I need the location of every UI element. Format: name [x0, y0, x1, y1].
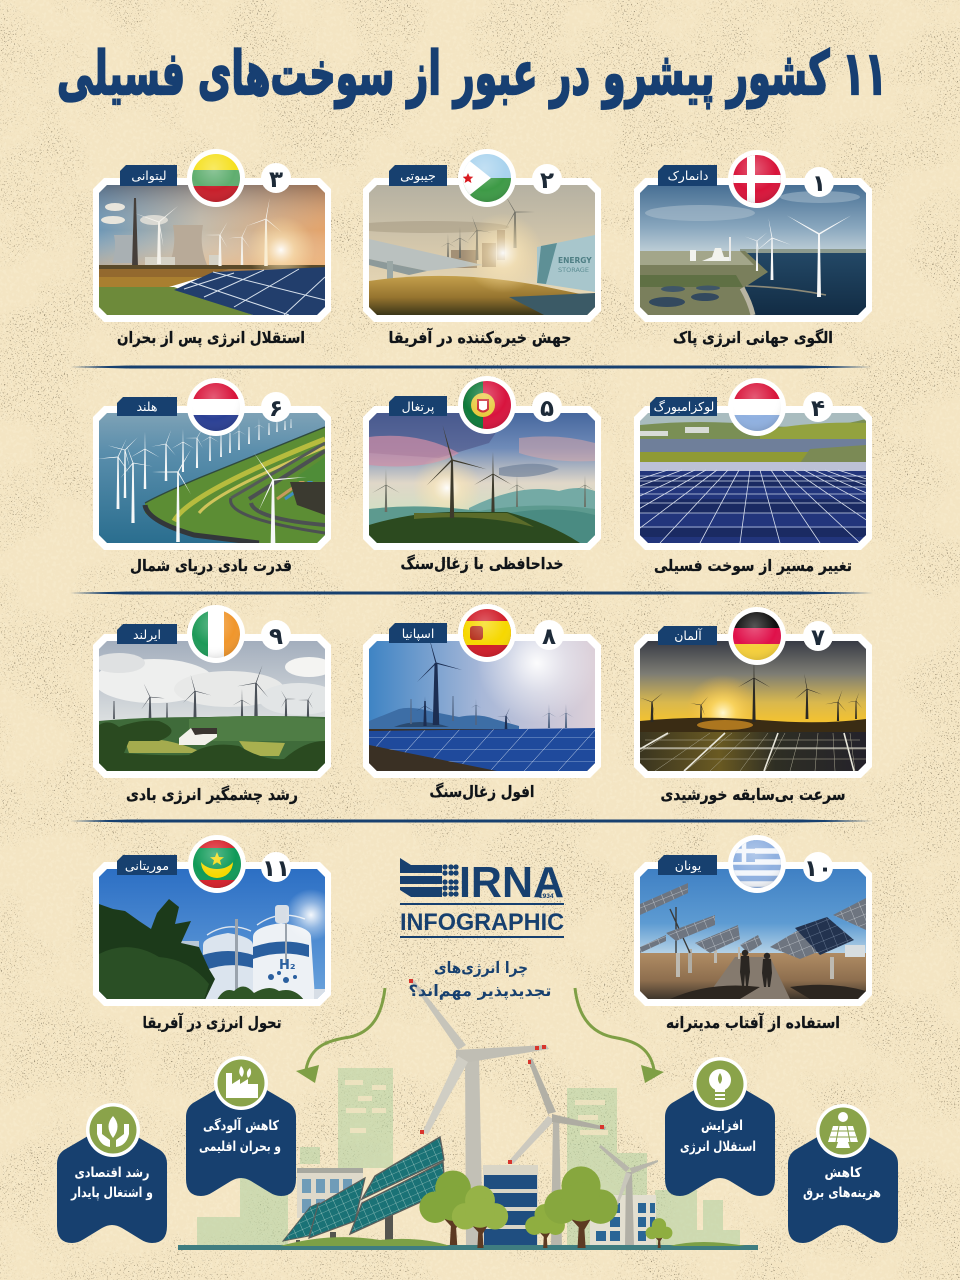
badge text [70, 1165, 153, 1201]
flag: Luxembourg [728, 378, 786, 436]
photo: green hills and turbines [93, 641, 339, 771]
arrow: right, green [575, 988, 664, 1083]
flag: Lithuania [187, 149, 245, 207]
illustration: renewable city [178, 979, 758, 1250]
flag: Greece [728, 835, 786, 893]
badge text: و اشتغال پایدار [70, 1185, 153, 1201]
number badge [803, 621, 833, 651]
photo: cooling towers and solar [99, 185, 329, 315]
number badge [534, 620, 564, 650]
wind turbine small [599, 1145, 658, 1246]
country label: پرتغال [402, 399, 435, 415]
flag: Mauritania [188, 835, 246, 893]
number badge [532, 164, 562, 194]
badge text [803, 1165, 881, 1201]
country label [658, 855, 717, 875]
number badge [261, 392, 291, 422]
IRNA wordmark: IRNA [459, 858, 564, 907]
country label: اسپانیا [402, 626, 434, 641]
badge: lower electricity costs [788, 1104, 898, 1243]
number badge: ۳ [269, 167, 283, 193]
number badge: ۸ [542, 624, 556, 650]
country label: جیبوتی [400, 168, 436, 184]
number badge: ۶ [269, 396, 283, 422]
country label: ایرلند [133, 627, 161, 643]
photo: solar and turbine [369, 641, 595, 771]
ground [178, 1245, 758, 1250]
panel: Luxembourg card [634, 378, 872, 550]
flag: Ireland [187, 605, 245, 663]
caption: Germany: سرعت بی‌سابقه خورشیدی [660, 785, 846, 804]
number badge: ۵ [540, 396, 554, 422]
country label [120, 165, 177, 186]
caption: Spain: افول زغال‌سنگ [430, 782, 534, 801]
flag: Germany [728, 607, 786, 665]
number badge: ۱۱ [262, 856, 290, 882]
country label: موریتانی [125, 858, 169, 874]
badge text [199, 1117, 281, 1155]
number badge [261, 163, 291, 193]
panel: Germany card [610, 607, 872, 778]
country label: آلمان [674, 628, 702, 643]
logo: IRNA Infographic [400, 858, 564, 938]
photo: solar farm [640, 413, 866, 543]
photo: North Sea wind farm [98, 413, 325, 544]
number badge: ۴ [811, 396, 825, 422]
number badge [804, 167, 834, 197]
badge: energy independence [665, 1057, 775, 1196]
panel: Spain card [363, 603, 601, 778]
icon: hands and leaf [86, 1103, 140, 1157]
caption: Mauritania: تحول انرژی در آفریقا [142, 1012, 282, 1032]
country label: یونان [675, 858, 702, 874]
panel: Mauritania card [93, 835, 337, 1006]
country label: دانمارک [668, 168, 708, 184]
country label [117, 624, 177, 644]
INFOGRAPHIC wordmark: INFOGRAPHIC [400, 909, 564, 936]
caption: Portugal: خداحافظی با زغال‌سنگ [400, 554, 564, 573]
photo: turbines on green hills [369, 413, 595, 543]
panel: Ireland card [93, 605, 339, 778]
right office building [590, 1195, 656, 1247]
number badge [532, 392, 562, 422]
number badge: ۹ [269, 624, 283, 650]
arrow: left, green [296, 988, 385, 1083]
country label [658, 165, 717, 186]
wind turbine medium [508, 1058, 606, 1246]
country label [389, 165, 447, 186]
country label: هلند [136, 399, 158, 414]
number badge: ۱۰ [804, 856, 832, 882]
panel: Portugal card [363, 376, 601, 550]
photo: offshore wind coast [640, 185, 866, 315]
caption: Netherlands: قدرت بادی دریای شمال [130, 556, 292, 575]
badge text: افزایش [701, 1118, 743, 1134]
caption: Djibouti: جهش خیره‌کننده در آفریقا [388, 327, 572, 347]
country label [389, 396, 447, 416]
number badge: ۱ [812, 171, 826, 197]
country label: لوکزامبورگ [654, 399, 714, 415]
panel: Denmark card [634, 150, 872, 322]
country label [117, 855, 177, 875]
wind turbine large [409, 979, 549, 1248]
caption: Lithuania: استقلال انرژی پس از بحران [117, 328, 305, 348]
photo: hydrogen tanks [99, 869, 337, 1000]
trees [419, 1166, 672, 1248]
badge text: کاهش [824, 1165, 862, 1181]
solar panels [283, 1137, 445, 1248]
photo: solar farm at sunset [640, 641, 866, 771]
number badge [261, 620, 291, 650]
number badge [803, 392, 833, 422]
icon: factory and leaf [214, 1056, 268, 1110]
caption: Denmark: الگوی جهانی انرژی پاک [673, 328, 833, 348]
country label: لیتوانی [131, 168, 167, 184]
pale background buildings [197, 1068, 740, 1248]
number badge: ۲ [540, 168, 554, 194]
icon: light bulb leaf [693, 1057, 747, 1111]
caption: Luxembourg: تغییر مسیر از سوخت فسیلی [654, 556, 852, 575]
number badge: ۷ [811, 625, 825, 651]
country label [389, 623, 447, 643]
country label [658, 626, 717, 645]
caption: Greece: استفاده از آفتاب مدیترانه [666, 1012, 840, 1032]
caption: Ireland: رشد چشمگیر انرژی بادی [126, 785, 298, 805]
flag: Denmark [728, 150, 786, 208]
year 1934: 1934 [539, 893, 554, 900]
badge text: هزینه‌های برق [803, 1185, 881, 1201]
panel: Lithuania card [93, 149, 331, 322]
panel: Netherlands card [93, 378, 331, 550]
badge: economic growth [57, 1103, 167, 1243]
divider [70, 592, 873, 594]
question heading [408, 959, 552, 1001]
badge: pollution reduction [186, 1056, 296, 1196]
icon: solar panel and sun [816, 1104, 870, 1158]
blue office building [483, 1165, 538, 1247]
badge text: و بحران اقلیمی [199, 1139, 281, 1155]
country label [117, 397, 177, 416]
question heading: تجدیدپذیر مهم‌اند؟ [408, 982, 552, 1001]
photo: solar and energy storage: ENERGY [558, 256, 592, 265]
photo: hydrogen tanks: H₂ [279, 958, 296, 973]
badge text: رشد اقتصادی [74, 1165, 150, 1181]
panel: Djibouti card [349, 149, 601, 322]
photo: solar and energy storage: STORAGE [558, 266, 589, 274]
flag: Portugal [458, 376, 516, 434]
logo mark [400, 858, 459, 897]
flag: Spain [458, 604, 516, 662]
badge text: استقلال انرژی [680, 1139, 756, 1155]
divider [70, 366, 873, 368]
badge text: کاهش آلودگی [203, 1117, 279, 1134]
panel: Greece card [634, 835, 872, 1006]
divider [70, 820, 873, 822]
photo: solar trackers [640, 869, 866, 999]
flag: Netherlands [187, 378, 245, 436]
flag: Djibouti [458, 149, 516, 207]
badge text [680, 1118, 756, 1155]
photo: solar and energy storage [349, 185, 595, 315]
question heading: چرا انرژی‌های [434, 959, 528, 978]
grey office building [297, 1168, 363, 1218]
